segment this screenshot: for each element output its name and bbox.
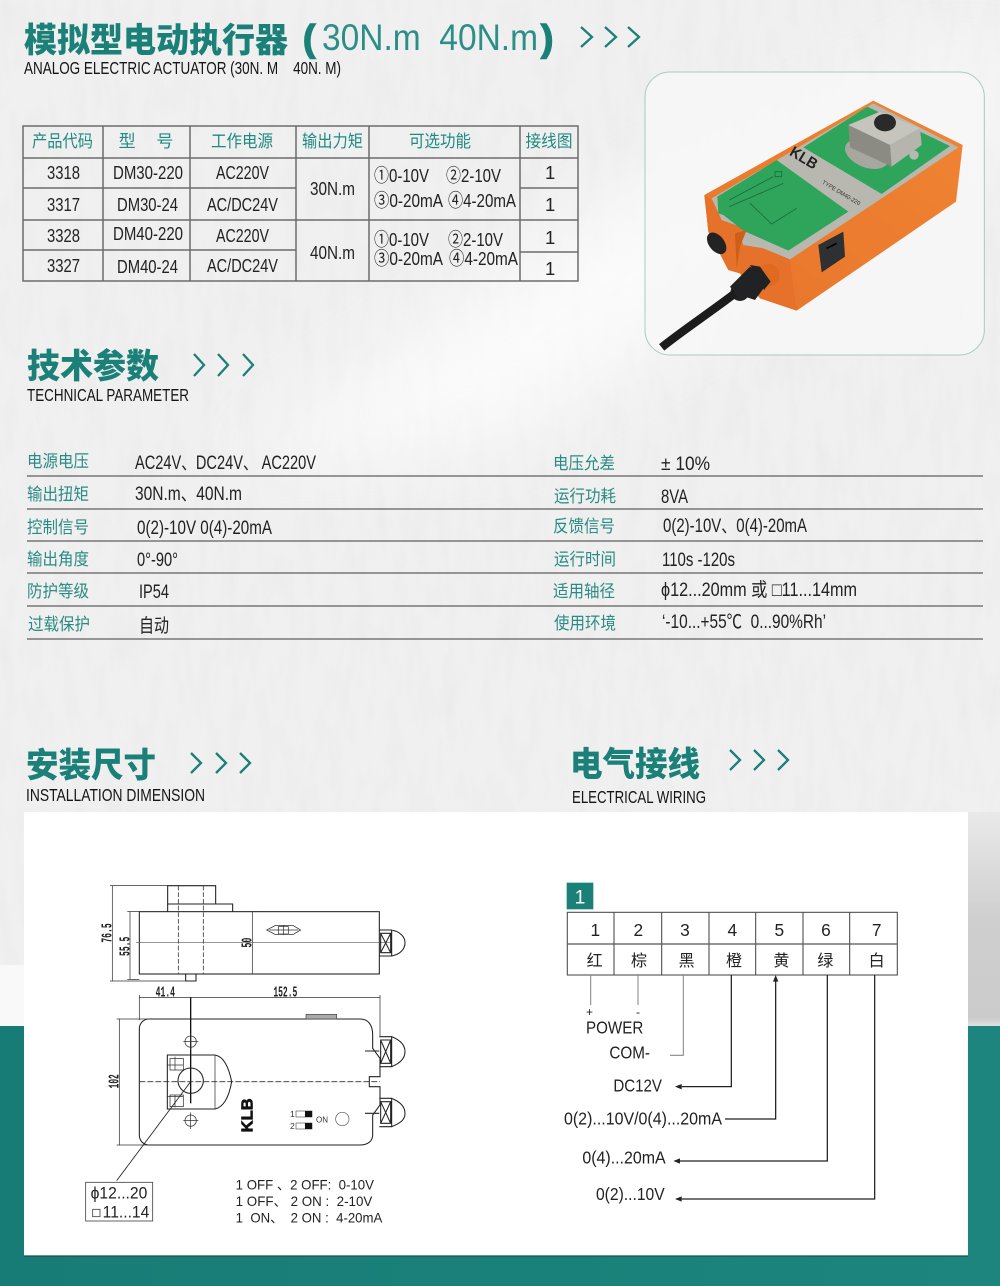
right parameter column: ± 10% [661, 454, 710, 475]
heading: technical parameter [27, 339, 253, 405]
table body rows: ①0-10V [374, 229, 430, 250]
English subtitle: TECHNICAL PARAMETER [27, 385, 189, 405]
logo: KLB: KLB [240, 1098, 257, 1132]
section title: 技术参数 [27, 339, 159, 388]
dimension labels, side view: 76.5 [100, 923, 116, 943]
black side connector [818, 232, 845, 272]
left parameter column: AC24V、DC24V、 AC220V [135, 453, 316, 474]
terminal numbers: 5 [775, 920, 784, 940]
wiring labels: COM- [609, 1043, 650, 1063]
terminal numbers: 7 [872, 920, 881, 940]
table body rows: AC220V [216, 162, 270, 183]
left parameter column: 控制信号 [27, 513, 89, 538]
wire colours: 橙 [726, 952, 742, 970]
wires [591, 975, 875, 1202]
wire colours [587, 952, 885, 970]
left parameter column: 输出角度 [27, 545, 89, 570]
table body rows: 30N.m [310, 178, 355, 199]
diagram: installation dimensions [86, 886, 405, 1226]
DIP switch marking: 2 [290, 1121, 295, 1131]
front view drawing: 102 [108, 1074, 124, 1088]
table body rows: 3327 [47, 255, 80, 276]
front view drawing [108, 986, 405, 1181]
table body rows: ③0-20mA [374, 190, 444, 211]
parameter list [27, 447, 983, 639]
side view drawing: 50 [240, 938, 256, 948]
side view drawing [100, 886, 405, 981]
table grid [23, 126, 578, 281]
right parameter column: 使用环境 [554, 609, 616, 634]
right parameter column: 运行功耗 [554, 482, 616, 507]
dimension labels, front view: 41.4 [156, 986, 175, 1002]
table body rows: AC/DC24V [207, 194, 279, 215]
black knob [703, 229, 730, 258]
cable gland [730, 265, 771, 301]
front view drawing: 152.5 [273, 986, 297, 1002]
cable [662, 293, 735, 347]
table body rows [47, 162, 555, 279]
left parameter column: 输出扭矩 [27, 480, 89, 505]
badge: diagram number: 1 [575, 887, 585, 908]
heading: installation dimension [26, 738, 250, 805]
wire colours: 红 [587, 952, 603, 970]
shaft size box: 11...14 [103, 1203, 149, 1222]
label: printed wiring lines [729, 172, 797, 224]
terminal numbers: 6 [821, 920, 831, 940]
heading: electrical wiring [570, 737, 788, 807]
table body rows: ④4-20mA [448, 190, 517, 211]
table body rows: 1 [545, 194, 555, 215]
table body rows: DM30-24 [117, 194, 178, 215]
English subtitle: ANALOG ELECTRIC ACTUATOR (30N. M 40N. M) [24, 58, 341, 78]
table body rows: ①0-10V [374, 165, 430, 186]
DIP switch settings text: 1 OFF 、2 OFF: 0-10V [236, 1176, 375, 1192]
table body rows: 3328 [47, 225, 80, 246]
right parameter column: 反馈信号 [553, 512, 615, 537]
torque values in title: ) [541, 18, 553, 59]
table header row: 产品代码 [32, 127, 93, 152]
Chinese title: 模拟型电动执行器 [24, 13, 288, 62]
table header row: 可选功能 [409, 127, 471, 152]
terminal numbers: 4 [728, 920, 738, 940]
wire colours: 白 [869, 952, 885, 970]
leader line to shaft size box [117, 1082, 191, 1181]
wiring labels: + [586, 1005, 593, 1019]
right parameter column: 0(2)-10V、0(4)-20mA [663, 516, 807, 537]
table header row: 输出力矩 [302, 127, 363, 152]
table body rows: 1 [545, 258, 555, 279]
metal shaft bracket [841, 112, 922, 175]
shaft size box: ϕ12...20 [91, 1183, 147, 1202]
right parameter column: 电压允差 [553, 449, 615, 474]
photo frame [645, 72, 984, 355]
table body rows: AC/DC24V [207, 255, 279, 276]
left parameter column: 过载保护 [28, 610, 90, 635]
label: type text on plate: TYPE DM40-220 [821, 180, 861, 208]
left parameter column [27, 447, 316, 637]
left parameter column: 电源电压 [27, 447, 89, 472]
section title: 安装尺寸 [26, 738, 156, 787]
English subtitle: INSTALLATION DIMENSION [26, 785, 205, 805]
terminal numbers [591, 920, 881, 940]
wire colours: 绿 [817, 952, 833, 970]
shaft size box [86, 1182, 153, 1222]
table body rows: DM30-220 [113, 162, 183, 183]
table header row: 工作电源 [211, 127, 273, 152]
wiring labels: 0(2)...10V [596, 1184, 665, 1204]
right parameter column [553, 449, 857, 634]
wire colours: 棕 [631, 952, 647, 970]
label: KLB brand: KLB [787, 144, 821, 173]
table body rows: ②2-10V [448, 229, 504, 250]
teal bottom band [0, 1026, 1000, 1286]
table body rows: DM40-24 [117, 256, 178, 277]
table body rows: 3318 [47, 162, 80, 183]
wiring labels: DC12V [613, 1076, 662, 1096]
right parameter column: 8VA [661, 487, 688, 508]
DIP switch settings text: 1 OFF、 2 ON : 2-10V [236, 1193, 373, 1209]
icon: chevrons [730, 750, 788, 770]
panel: white diagram card [24, 812, 968, 1256]
DIP switch marking [290, 1109, 349, 1131]
left parameter column: 防护等级 [27, 577, 89, 602]
DIP switch settings text: 1 ON、 2 ON : 4-20mA [236, 1210, 383, 1226]
terminal numbers: 2 [634, 920, 643, 940]
DIP switch settings text [236, 1176, 383, 1226]
actuator body [662, 101, 963, 347]
table body rows: ③0-20mA [374, 248, 444, 269]
torque values in title: 30N.m 40N.m [322, 17, 538, 58]
icon: chevrons [194, 354, 253, 376]
wiring labels: - [636, 1005, 640, 1019]
left parameter column: IP54 [139, 582, 169, 603]
table body rows: 40N.m [310, 242, 355, 263]
right parameter column: ϕ12...20mm 或 □11...14mm [661, 579, 857, 601]
right parameter column: 适用轴径 [553, 577, 615, 602]
side view drawing: 55.5 [118, 937, 134, 956]
right parameter column: 110s -120s [662, 550, 735, 571]
terminal numbers: 3 [680, 920, 690, 940]
wire colours: 黑 [679, 953, 695, 970]
row dividers [27, 476, 983, 639]
table header row [32, 127, 572, 152]
wiring labels: 0(4)...20mA [582, 1148, 666, 1168]
left parameter column: 0(2)-10V 0(4)-20mA [137, 518, 272, 539]
right parameter column: ‘-10...+55℃ 0...90%Rh’ [662, 612, 826, 633]
DIP switch marking: ON [316, 1115, 328, 1124]
left parameter column: 0°-90° [137, 550, 178, 571]
badge: diagram number [567, 883, 593, 909]
icon: chevrons [191, 753, 250, 773]
English subtitle: ELECTRICAL WIRING [572, 787, 706, 807]
left parameter column: 自动 [139, 615, 169, 637]
panel: product photo of actuator [645, 72, 984, 355]
wire colours: 黄 [773, 952, 789, 970]
wiring labels: POWER [586, 1017, 643, 1037]
heading: analog electric actuator [24, 13, 639, 78]
right parameter column: 运行时间 [554, 545, 616, 570]
wiring labels [564, 1005, 722, 1204]
diagram: electrical wiring [564, 883, 897, 1204]
DIP switch marking: 1 [290, 1109, 295, 1119]
torque values in title: ( [303, 18, 316, 59]
table header row: 型 号 [119, 127, 173, 152]
table header row: 接线图 [526, 127, 572, 152]
table body rows: AC220V [216, 225, 270, 246]
table body rows: 3317 [47, 194, 80, 215]
terminal numbers: 1 [591, 920, 600, 940]
wiring labels: 0(2)...10V/0(4)...20mA [564, 1108, 722, 1128]
table: product models [23, 126, 578, 281]
left parameter column: 30N.m、40N.m [135, 484, 242, 505]
table body rows: 1 [545, 227, 555, 248]
section title: 电气接线 [570, 737, 700, 786]
table body rows: DM40-220 [113, 223, 183, 244]
terminal table [567, 912, 897, 975]
icon: chevrons [581, 27, 639, 47]
table body rows: 1 [545, 162, 555, 183]
table body rows: ②2-10V [446, 165, 502, 186]
table body rows: ④4-20mA [449, 248, 519, 269]
